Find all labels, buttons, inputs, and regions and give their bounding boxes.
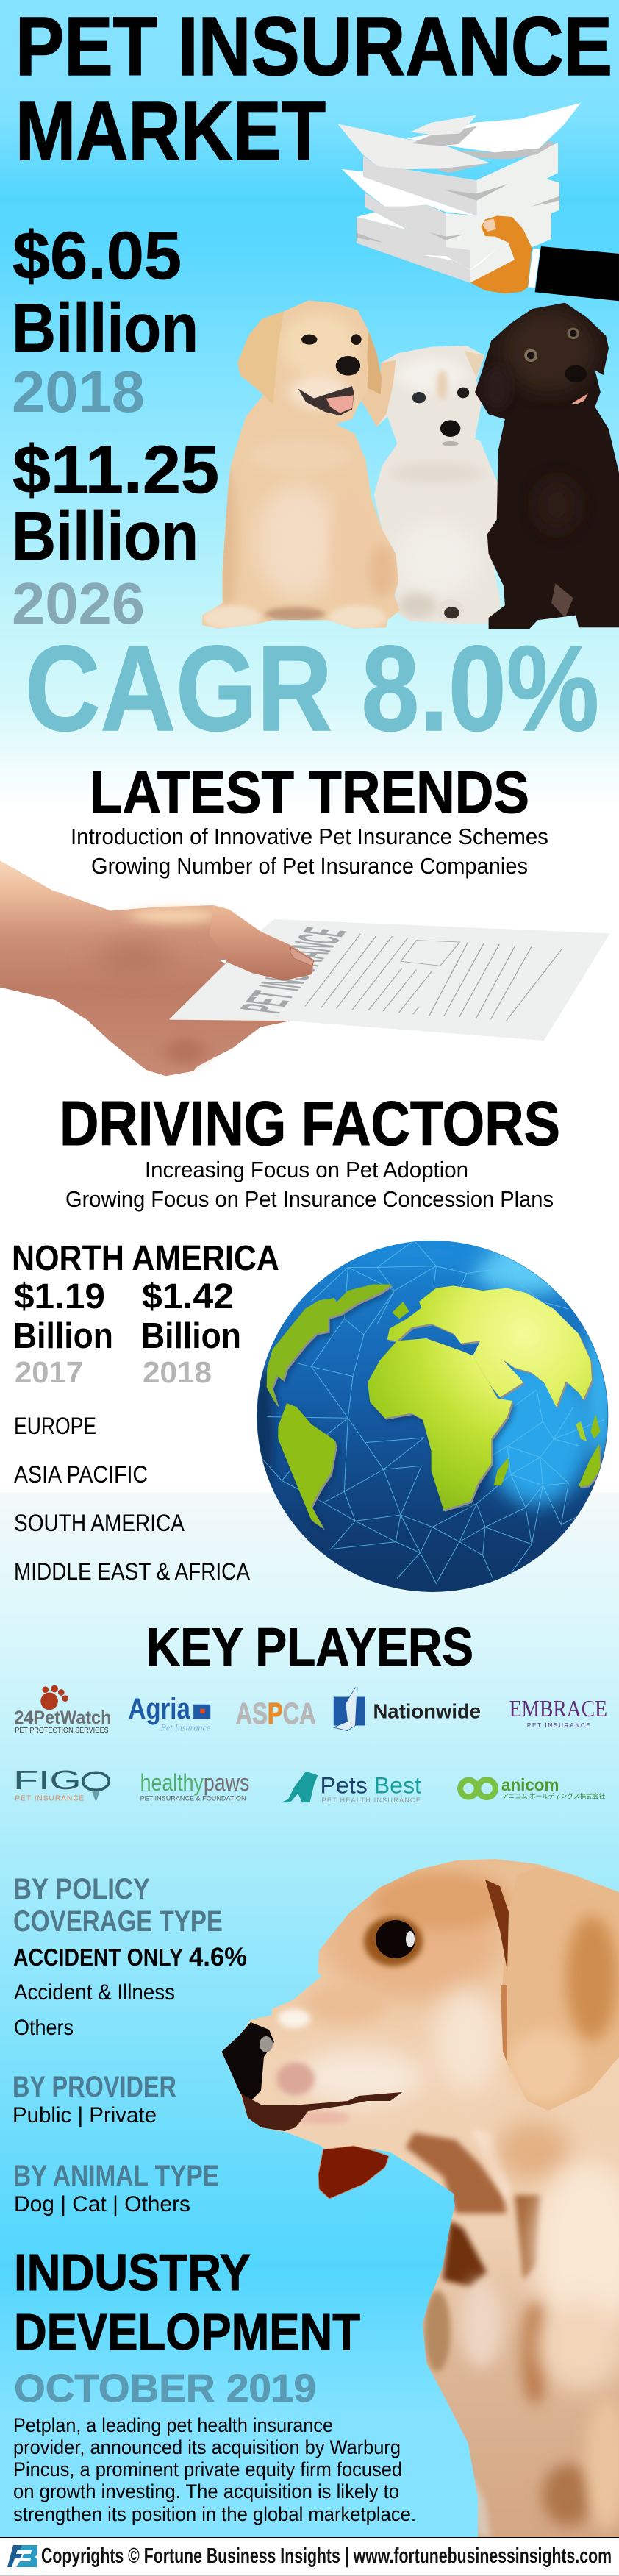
stat: 2026 market size: Billion (12, 497, 198, 574)
regional panel: north america: Billion (13, 1316, 113, 1356)
text: development paragraph: strengthen its position in the global marketplace. (13, 2503, 416, 2525)
text: development paragraph: on growth investing. The acquisition is likely to (13, 2480, 399, 2502)
stat: 2018 market size: $6.05 (12, 218, 182, 293)
heading: latest trends: LATEST TRENDS (90, 760, 529, 826)
text: trends list: Introduction of Innovative Pet Insurance Schemes (71, 824, 548, 849)
segment: policy coverage: BY POLICY (13, 1873, 150, 1905)
text: other regions: EUROPE (14, 1413, 96, 1439)
logo: 24PetWatch: PET PROTECTION SERVICES (15, 1727, 109, 1735)
heading: driving factors: DRIVING FACTORS (60, 1089, 560, 1159)
text: development paragraph: Petplan, a leading pet health insurance (13, 2414, 333, 2436)
logo: ASPCA: ASPCA (236, 1696, 316, 1730)
segment: policy coverage: ACCIDENT ONLY (13, 1944, 183, 1971)
stat: 2018 market size: Billion (12, 289, 198, 366)
segment: provider: BY PROVIDER (12, 2071, 176, 2103)
icon: Fortune Business Insights logo (7, 2545, 37, 2567)
background: lower gradient (0, 1492, 619, 2537)
text: development paragraph: provider, announced its acquisition by Warburg (13, 2436, 401, 2458)
logo: Pets Best (281, 1772, 421, 1804)
segment: policy coverage: COVERAGE TYPE (13, 1905, 223, 1938)
text: driving factors list (65, 1157, 554, 1212)
logo: healthypaws: PET INSURANCE & FOUNDATION (140, 1794, 246, 1802)
regional panel: north america: Billion (141, 1316, 241, 1356)
ear (501, 1866, 619, 2111)
title (15, 0, 612, 177)
puppy: golden tan (199, 299, 401, 630)
heading: key players: KEY PLAYERS (146, 1618, 473, 1677)
logo: healthypaws: healthypaws (140, 1769, 249, 1796)
heading: industry development: DEVELOPMENT (14, 2303, 360, 2361)
logo: Figo: PET INSURANCE (15, 1794, 85, 1802)
thumb (210, 905, 314, 980)
image: big dog profile (222, 1859, 619, 2537)
segment: animal type: BY ANIMAL TYPE (13, 2160, 219, 2192)
heading: industry development: INDUSTRY (14, 2244, 251, 2301)
stat: 2026 market size: $11.25 (12, 432, 219, 507)
regional panel: north america: 2018 (143, 1355, 212, 1389)
heading: industry development (14, 2244, 360, 2361)
logo: Figo (13, 1766, 109, 1802)
logo: Embrace: PET INSURANCE (527, 1722, 590, 1729)
text: other regions: SOUTH AMERICA (14, 1510, 185, 1536)
text: driving factors list: Growing Focus on Pet Insurance Concession Plans (65, 1186, 554, 1212)
text: other regions: ASIA PACIFIC (14, 1461, 148, 1488)
footer bar (0, 2537, 619, 2576)
segment: policy coverage: 4.6% (189, 1943, 247, 1972)
background: top gradient (0, 0, 619, 809)
text: other regions (14, 1413, 251, 1585)
logo: anicom: anicom (501, 1775, 559, 1794)
segment: provider (12, 2071, 176, 2127)
land edge (268, 1286, 602, 1530)
date: october 2019: OCTOBER 2019 (14, 2366, 316, 2411)
stat: 2018 market size (12, 218, 198, 424)
segment: provider: Public | Private (12, 2103, 157, 2127)
icon: globe (250, 1238, 618, 1592)
text: driving factors list: Increasing Focus on Pet Adoption (145, 1157, 468, 1182)
logo: anicom (460, 1775, 606, 1800)
insurance paper (169, 919, 610, 1041)
text: trends list: Growing Number of Pet Insurance Companies (91, 853, 528, 879)
logo: 24PetWatch (14, 1685, 111, 1735)
land (267, 1285, 601, 1528)
image: three puppies (199, 299, 619, 630)
regional panel: north america (12, 1239, 279, 1389)
logo: Pets Best: PET HEALTH INSURANCE (322, 1797, 421, 1804)
logo: Nationwide (334, 1688, 481, 1731)
segment: animal type (13, 2160, 219, 2216)
regional panel: north america: NORTH AMERICA (12, 1239, 279, 1278)
segment: policy coverage (13, 1873, 247, 2040)
logos: key players (13, 1685, 607, 1804)
stat: 2026 market size: 2026 (12, 571, 145, 636)
nose (221, 2022, 274, 2101)
logo: 24PetWatch: 24PetWatch (14, 1708, 111, 1728)
segment: policy coverage: Others (14, 2016, 74, 2040)
stat: 2018 market size: 2018 (12, 359, 145, 424)
paper title: PET INSURANCE (228, 925, 359, 1016)
text: trends list (71, 824, 548, 879)
regional panel: north america: $1.19 (14, 1277, 105, 1316)
mouth (241, 2092, 402, 2131)
stat: 2026 market size (12, 432, 219, 636)
logo: Agria: Pet Insurance (160, 1722, 211, 1733)
text: other regions: MIDDLE EAST & AFRICA (14, 1558, 251, 1585)
tongue (318, 2146, 389, 2199)
logo: Figo: FIG (13, 1766, 82, 1795)
segment: policy coverage: Accident & Illness (14, 1980, 175, 2005)
icon: paper stack held by hand (337, 103, 619, 301)
logo: Pets Best: Pets Best (321, 1772, 421, 1799)
image: hand holding insurance paper (0, 860, 610, 1076)
text: development paragraph (13, 2414, 416, 2525)
regional panel: north america: $1.42 (142, 1277, 234, 1316)
segment: animal type: Dog | Cat | Others (14, 2192, 190, 2216)
eye (364, 1916, 423, 1966)
regional panel: north america: 2017 (15, 1355, 83, 1389)
logo: Nationwide: Nationwide (373, 1700, 481, 1723)
logo: Agria: Agria (129, 1693, 190, 1725)
logo: Embrace: EMBRACE (509, 1696, 607, 1722)
puppy: dark chocolate (472, 302, 619, 630)
logo: anicom: アニコム ホールディングス株式会社 (502, 1792, 606, 1800)
text: development paragraph: Pincus, a prominent private equity firm focused (13, 2458, 402, 2480)
land drop shadow (270, 1289, 515, 1533)
puppy: cream (355, 343, 505, 627)
title: MARKET (15, 85, 326, 177)
